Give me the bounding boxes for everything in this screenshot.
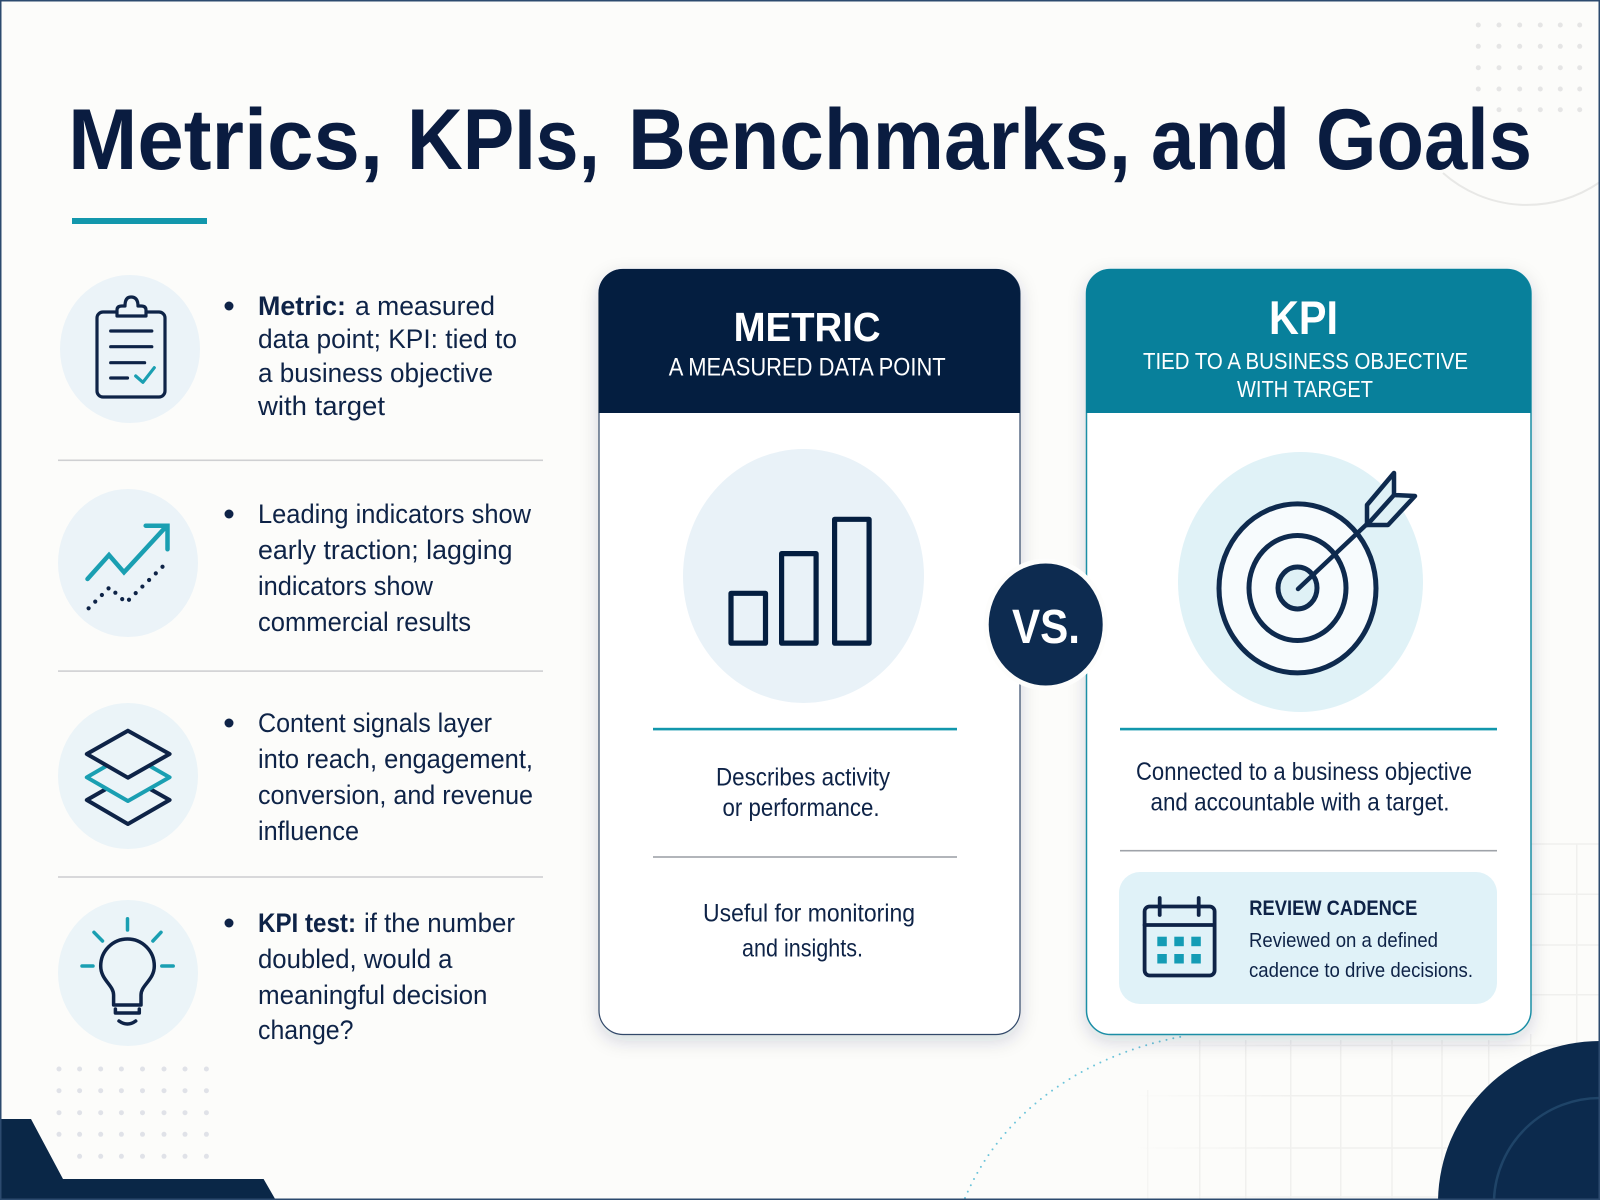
list item: metric definition: [60, 275, 517, 423]
KPI header: WITH TARGET: [1237, 376, 1373, 402]
metric usefulness: and insights.: [742, 935, 863, 963]
bullet text: KPI test: meaningful decision: [258, 980, 488, 1010]
bullet text: content signals: [224, 708, 533, 846]
title: and: [1151, 92, 1290, 188]
KPI description: and accountable with a target.: [1150, 789, 1450, 817]
metric description: Describes activity: [716, 764, 890, 792]
bullet text: content signals: influence: [258, 816, 359, 846]
bullet text: indicators: early traction; lagging: [258, 535, 512, 565]
VS badge: VS.: [1012, 601, 1080, 654]
review cadence text: cadence to drive decisions.: [1249, 959, 1473, 982]
metric header: METRIC: [734, 304, 881, 350]
bullet text: indicators: Leading indicators show: [258, 499, 531, 529]
list item: leading and lagging: [58, 489, 531, 637]
icon: clipboard: [60, 275, 200, 423]
title: KPIs,: [407, 92, 600, 188]
VS badge: [984, 558, 1108, 690]
list item: content signals: [58, 703, 533, 849]
review cadence text: Reviewed on a defined: [1249, 929, 1438, 952]
decoration: bottom-right navy circle: [1438, 1041, 1600, 1200]
bullet text: content signals: Content signals layer: [258, 708, 492, 738]
metric usefulness: Useful for monitoring: [703, 900, 915, 928]
list item: KPI test: [58, 900, 515, 1046]
bullet text: content signals: into reach, engagement,: [258, 744, 533, 774]
KPI header: TIED TO A BUSINESS OBJECTIVE: [1143, 348, 1468, 374]
review cadence text: [1249, 897, 1473, 982]
bullet text: KPI test: change?: [258, 1015, 354, 1045]
bullet text: metric: [224, 291, 517, 421]
bullet text: KPI test: KPI test:: [258, 908, 356, 938]
decoration: top-right arc: [1443, 173, 1600, 205]
callout: review cadence: [1119, 872, 1497, 1004]
bullet text: KPI test: if the number: [364, 908, 515, 938]
title: Goals: [1316, 92, 1532, 188]
bullet text: indicators: commercial results: [258, 607, 471, 637]
title: Metrics,: [68, 92, 383, 188]
bullet text: metric: data point; KPI: tied to: [258, 324, 517, 354]
decoration: dotted arc: [965, 1036, 1185, 1198]
icon: bar chart: [683, 449, 924, 703]
KPI description: [1136, 758, 1472, 817]
icon: calendar: [1145, 898, 1215, 976]
bullet text: indicators: indicators show: [258, 571, 433, 601]
title accent bar: [72, 218, 207, 224]
metric usefulness: [703, 900, 915, 963]
icon: trend arrow: [58, 489, 198, 637]
bullet text: metric: a measured: [355, 291, 495, 321]
metric header: A MEASURED DATA POINT: [669, 354, 946, 382]
icon: lightbulb: [58, 900, 198, 1046]
metric description: or performance.: [722, 794, 880, 822]
panel: metric card: [598, 269, 1020, 1034]
bullet text: content signals: conversion, and revenue: [258, 780, 533, 810]
decoration: top-right dot grid: [1476, 22, 1582, 112]
icon: layers: [58, 703, 198, 849]
panel: KPI card: [1086, 269, 1531, 1034]
icon: target with arrow: [1178, 452, 1423, 712]
KPI header: [1086, 269, 1531, 413]
bullet text: metric: with target: [257, 391, 386, 421]
KPI description: Connected to a business objective: [1136, 758, 1472, 786]
title: [68, 92, 1532, 188]
bullet text: metric: a business objective: [258, 358, 493, 388]
metric description: [716, 764, 890, 822]
KPI header: KPI: [1269, 291, 1338, 344]
title: Benchmarks,: [628, 92, 1131, 188]
metric header: [598, 269, 1020, 413]
decoration: bottom-left dot grid: [56, 1066, 209, 1159]
decoration: bottom-left navy shape: [0, 1119, 276, 1200]
bullet text: KPI test: [224, 908, 515, 1045]
bullet text: metric: Metric:: [258, 291, 346, 321]
bullet text: KPI test: doubled, would a: [258, 944, 453, 974]
review cadence text: REVIEW CADENCE: [1249, 897, 1417, 920]
bullet text: indicators: [224, 499, 531, 637]
